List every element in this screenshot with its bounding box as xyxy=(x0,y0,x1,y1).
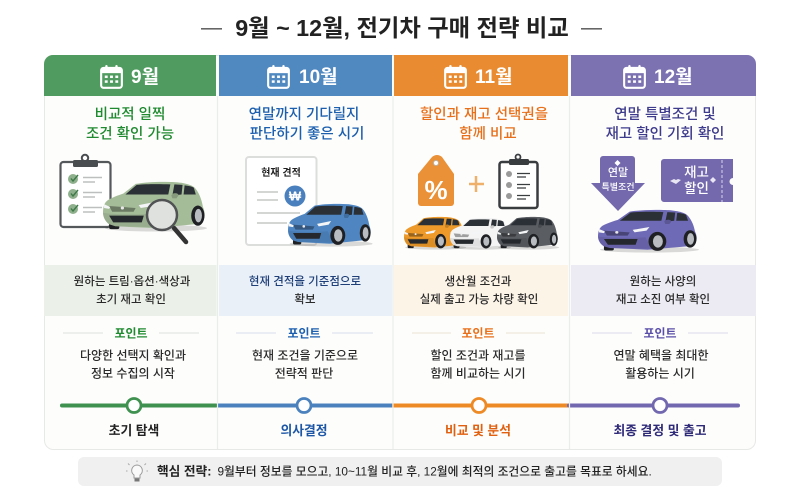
November point xyxy=(412,326,545,380)
December header xyxy=(571,55,756,96)
panel: October xyxy=(217,55,392,438)
key strategy callout: 9월부터 정보를 모으고, 10~11월 비교 후, 12월에 최적의 조건으로 출고를 목표로 하세요. xyxy=(218,464,652,478)
September point: 다양한 선택지 확인과 xyxy=(80,348,186,362)
October header: 10월 xyxy=(299,66,338,88)
car: orange xyxy=(404,217,466,250)
icon: year-end arrow: 특별조건 xyxy=(601,182,635,192)
September timeline xyxy=(62,398,216,412)
October point: 전략적 판단 xyxy=(275,366,333,380)
car: green xyxy=(103,182,207,232)
October point: 현재 조건을 기준으로 xyxy=(252,348,358,362)
icon: plus xyxy=(469,176,484,192)
panel: December xyxy=(569,55,756,438)
November timeline xyxy=(392,398,569,412)
icon: estimate document xyxy=(246,157,316,245)
December header: 12월 xyxy=(654,66,693,88)
December status: 재고 소진 여부 확인 xyxy=(616,293,710,306)
October status: 현재 견적을 기준점으로 xyxy=(249,275,362,288)
icon: stock discount ticket xyxy=(661,159,733,202)
icon: estimate document: ₩ xyxy=(289,188,302,204)
September point xyxy=(63,326,199,380)
December timeline xyxy=(569,398,738,412)
panel: November xyxy=(392,55,569,438)
October point: 포인트 xyxy=(287,326,321,340)
October headline: 연말까지 기다릴지 xyxy=(249,106,359,123)
October timeline xyxy=(217,398,392,412)
November point: 할인 조건과 재고를 xyxy=(430,348,526,362)
September stage label: 초기 탐색 xyxy=(109,423,159,438)
November header: 11월 xyxy=(475,66,513,88)
December status xyxy=(571,265,756,316)
November status: 실제 출고 가능 차량 확인 xyxy=(420,292,538,306)
November headline: 할인과 재고 선택권을 xyxy=(420,106,548,123)
September headline: 조건 확인 가능 xyxy=(86,126,174,142)
November status: 생산월 조건과 xyxy=(445,275,512,288)
key strategy callout xyxy=(78,457,722,486)
November stage label: 비교 및 분석 xyxy=(445,423,511,438)
December point xyxy=(592,326,728,380)
icon: light bulb xyxy=(126,460,148,482)
December point: 활용하는 시기 xyxy=(625,366,695,380)
key strategy callout: 핵심 전략: xyxy=(157,464,211,478)
December point: 포인트 xyxy=(643,326,677,340)
icon: estimate document: 현재 견적 xyxy=(261,166,301,179)
December headline: 연말 특별조건 및 xyxy=(614,106,716,123)
September headline xyxy=(86,106,174,142)
September header: 9월 xyxy=(131,66,159,88)
December headline: 재고 할인 기회 확인 xyxy=(606,126,724,142)
September point: 정보 수집의 시작 xyxy=(91,366,175,380)
October header xyxy=(219,55,392,96)
September status: 초기 재고 확인 xyxy=(96,293,166,306)
September status: 원하는 트림·옵션·색상과 xyxy=(74,274,191,288)
November header xyxy=(394,55,568,96)
icon: year-end arrow: 연말 xyxy=(608,165,628,179)
icon: discount tag xyxy=(418,155,454,206)
title: 9월 ~ 12월, 전기차 구매 전략 비교 xyxy=(235,15,569,41)
September headline: 비교적 일찍 xyxy=(95,106,165,123)
November point: 포인트 xyxy=(461,326,495,340)
October point xyxy=(236,326,373,380)
December stage label: 최종 결정 및 출고 xyxy=(613,423,707,438)
December point: 연말 혜택을 최대한 xyxy=(614,348,708,362)
December status: 원하는 사양의 xyxy=(630,274,696,288)
October stage label: 의사결정 xyxy=(280,423,328,438)
icon: magnifier xyxy=(147,200,186,242)
December headline xyxy=(606,106,724,142)
car: blue xyxy=(288,204,373,247)
icon: discount tag: % xyxy=(424,175,448,205)
car: purple xyxy=(598,210,699,253)
October headline xyxy=(249,106,364,142)
September status xyxy=(44,265,216,316)
icon: stock discount ticket: 할인 xyxy=(684,180,709,196)
car: dark gray xyxy=(497,217,559,250)
November status xyxy=(394,265,568,316)
icon: year-end arrow xyxy=(591,156,645,211)
October status xyxy=(219,265,392,316)
icon: checklist clipboard xyxy=(500,154,538,208)
November headline: 함께 비교 xyxy=(459,126,517,142)
comparison table panel xyxy=(44,55,756,450)
car: white xyxy=(450,218,511,250)
October headline: 판단하기 좋은 시기 xyxy=(250,126,364,142)
icon: stock discount ticket: 재고 xyxy=(684,165,709,180)
November point: 함께 비교하는 시기 xyxy=(430,366,526,380)
October status: 확보 xyxy=(294,293,316,306)
icon: checklist clipboard xyxy=(60,155,110,227)
panel: September xyxy=(44,55,216,438)
September header xyxy=(44,55,216,96)
November headline xyxy=(420,106,548,142)
September point: 포인트 xyxy=(114,326,148,340)
